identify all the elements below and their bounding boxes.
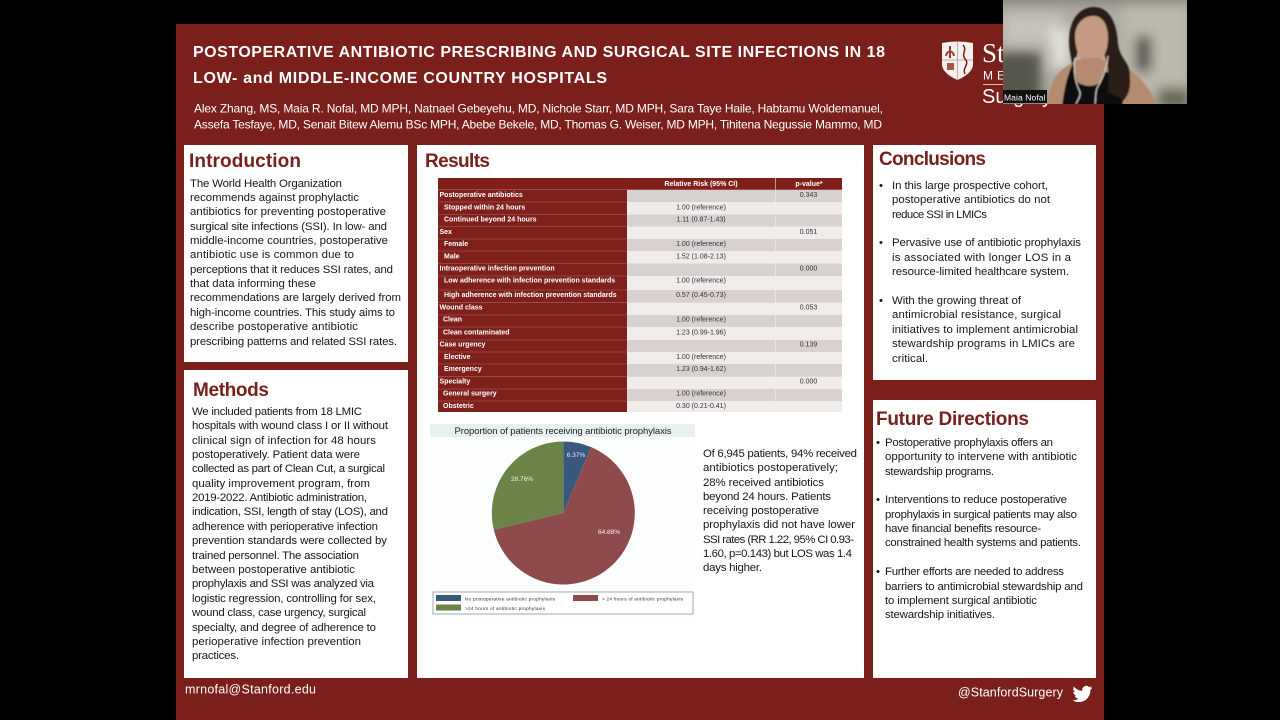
text block: methods: indication, SSI, length of stay (LOS), and (192, 506, 388, 518)
pie slice: none (563, 442, 591, 513)
results table: General surgery (443, 390, 497, 398)
text block: methods: logistic regression, controlling for sex, (192, 593, 376, 605)
text block: results summary: antibiotics postoperatively; (703, 462, 838, 474)
title: POSTOPERATIVE ANTIBIOTIC PRESCRIBING AND SURGICAL SITE INFECTIONS IN 18 (193, 44, 885, 61)
results table: 0.139 (800, 342, 817, 348)
heading: introduction: Introduction (189, 151, 301, 172)
icon: Stanford shield (942, 42, 973, 80)
results table: 1.00 (reference) (676, 204, 726, 212)
text block: future directions: Postoperative prophylaxis offers an (885, 437, 1053, 449)
heading: methods: Methods (193, 380, 269, 401)
pie chart: proportion of patients receiving antibiotic prophylaxis (430, 424, 695, 618)
text block: introduction: high-income countries. This study aims to (190, 307, 395, 319)
pie chart: proportion of patients receiving antibiotic prophylaxis: 6.37% (567, 452, 585, 459)
results table: Emergency (444, 366, 482, 373)
poster background (176, 24, 1104, 720)
text block: introduction: surgical site infections (SSI). In low- and (190, 221, 387, 233)
results table: Obstetric (443, 403, 474, 410)
results table: 0.000 (800, 266, 817, 272)
text block: conclusions: resource-limited healthcare system. (892, 266, 1069, 278)
pie chart: proportion of patients receiving antibiotic prophylaxis: Proportion of patients receiving antibiotic prophylaxis (454, 426, 672, 437)
text block: results summary: 1.60, p=0.143) but LOS was 1.4 (703, 548, 852, 560)
results table: Postoperative antibiotics (440, 192, 523, 199)
results table: 1.00 (reference) (676, 278, 726, 284)
text block: methods: hospitals with wound class I or II without (192, 420, 389, 432)
results table: 1.11 (0.87-1.43) (676, 216, 726, 224)
text block: future directions: • (876, 437, 880, 449)
text block: introduction: describe postoperative antibiotic (190, 321, 358, 333)
results table: Low adherence with infection prevention standards (444, 278, 615, 284)
text block: future directions: • (876, 494, 880, 506)
footer email: mrnofal@Stanford.edu (185, 682, 316, 696)
text block: introduction: recommendations are largely derived from (190, 292, 401, 304)
text block: conclusions: Pervasive use of antibiotic prophylaxis (892, 237, 1081, 249)
results table: Elective (444, 354, 471, 361)
text block: conclusions: critical. (892, 353, 928, 365)
text block: future directions: constrained health systems and patients. (885, 537, 1081, 549)
results table: Specialty (440, 378, 470, 386)
text block: introduction: The World Health Organization (190, 178, 342, 190)
results table: 1.23 (0.94-1.62) (676, 366, 726, 373)
results table: 1.00 (reference) (676, 241, 726, 248)
text block: introduction: middle-income countries, postoperative (190, 235, 388, 247)
authors: Alex Zhang, MS, Maia R. Nofal, MD MPH, Natnael Gebeyehu, MD, Nichole Starr, MD MPH, Sara Taye Haile, Habtamu Woldemanuel, (194, 102, 883, 116)
text block: methods: collected as part of Clean Cut, a surgical (192, 463, 385, 475)
text block: methods: prevention standards were collected by (192, 535, 387, 547)
results table: Intraoperative infection prevention (440, 266, 555, 272)
text block: future directions: • (876, 566, 880, 578)
text block: conclusions: • (879, 180, 883, 192)
text block: future directions: opportunity to intervene with antibiotic (885, 451, 1077, 463)
text block: introduction: recommends against prophylactic (190, 192, 359, 204)
panel: results (417, 145, 864, 678)
text block: conclusions: stewardship programs in LMICs are (892, 338, 1075, 350)
results table: Female (444, 241, 468, 248)
results table: 0.343 (800, 192, 817, 199)
icon: twitter bird (1072, 686, 1092, 702)
text block: conclusions: • (879, 295, 883, 307)
pie slice: over 24 hours (492, 442, 563, 530)
text block: methods: between postoperative antibiotic (192, 564, 355, 576)
panel: conclusions (873, 145, 1096, 380)
title: LOW- and MIDDLE-INCOME COUNTRY HOSPITALS (193, 70, 607, 87)
results table: p-value* (795, 181, 823, 188)
text block: methods (191, 406, 389, 662)
text block: results summary: beyond 24 hours. Patients (703, 491, 831, 503)
text block: future directions: stewardship programs. (885, 466, 994, 478)
text block: introduction (190, 178, 401, 348)
text block: conclusions: postoperative antibiotics do not (892, 194, 1051, 206)
text block: conclusions: In this large prospective cohort, (892, 180, 1048, 192)
results table: 0.051 (800, 229, 817, 236)
text block: methods: postoperatively. Patient data were (192, 449, 360, 461)
results table: Sex (440, 229, 452, 236)
heading: results: Results (425, 151, 490, 172)
results table: Stopped within 24 hours (444, 204, 525, 212)
text block: methods: perioperative infection prevention (192, 636, 361, 648)
text block: future directions: Interventions to reduce postoperative (885, 494, 1067, 506)
panel: introduction (184, 145, 408, 362)
text block: introduction: antibiotic use is common due to (190, 249, 354, 261)
text block: future directions: prophylaxis in surgical patients may also (885, 509, 1077, 521)
text block: methods: We included patients from 18 LMIC (192, 406, 362, 418)
results table (438, 178, 842, 412)
chart legend: < 24 hours of antibiotic prophylaxis (602, 596, 684, 602)
text block: methods: quality improvement program, from (192, 478, 370, 490)
webcam name tag: Maia Nofal (1004, 92, 1046, 102)
text block: results summary: 28% received antibiotics (703, 477, 824, 489)
results table: Male (444, 254, 460, 260)
results table: Clean (443, 316, 462, 324)
text block: results summary: SSI rates (RR 1.22, 95% CI 0.93- (703, 534, 854, 546)
text block: methods: prophylaxis and SSI was analyzed via (192, 578, 375, 590)
text block: results summary: days higher. (703, 562, 762, 574)
heading: conclusions: Conclusions (879, 149, 986, 170)
results table: 1.23 (0.99-1.96) (676, 330, 726, 336)
text block: conclusions: reduce SSI in LMICs (892, 209, 987, 221)
text block: introduction: that data informing these (190, 278, 316, 290)
text block: methods: specialty, and degree of adherence to (192, 622, 376, 634)
pie chart: proportion of patients receiving antibiotic prophylaxis: 64.88% (598, 529, 620, 536)
text block: conclusions: initiatives to implement antimicrobial (892, 324, 1078, 336)
results table: Relative Risk (95% CI) (664, 181, 738, 188)
results table: 1.00 (reference) (676, 316, 726, 324)
text block: results summary: prophylaxis did not have lower (703, 519, 855, 531)
text block: results summary: Of 6,945 patients, 94% received (703, 448, 857, 460)
text block: methods: practices. (192, 650, 239, 662)
text block: introduction: antibiotics for preventing postoperative (190, 206, 386, 218)
Stanford logo: MEDICINE (983, 68, 1074, 82)
text block: methods: trained personnel. The association (192, 550, 359, 562)
panel: methods (184, 370, 408, 678)
webcam video of presenter (1003, 0, 1187, 104)
text block: future directions: Further efforts are needed to address (885, 566, 1064, 578)
results table: 0.053 (800, 304, 817, 312)
pie chart: proportion of patients receiving antibiotic prophylaxis: 28.76% (511, 476, 533, 483)
heading: future directions: Future Directions (876, 409, 1029, 430)
results table: 0.57 (0.45-0.73) (676, 292, 726, 299)
text block: conclusions: • (879, 237, 883, 249)
text block: methods: clinical sign of infection for 48 hours (192, 435, 376, 447)
text block: future directions (876, 437, 1083, 621)
panel: future directions (873, 400, 1096, 678)
text block: methods: adherence with perioperative infection (192, 521, 378, 533)
results table: 1.52 (1.08-2.13) (676, 254, 726, 260)
results table: 0.000 (800, 378, 817, 386)
results table: Case urgency (440, 342, 486, 348)
chart legend: >24 hours of antibiotic prophylaxis (465, 606, 546, 612)
results table: 1.00 (reference) (676, 390, 726, 398)
results table: Continued beyond 24 hours (444, 216, 537, 224)
pie slice: under 24 hours (494, 447, 635, 584)
text block: conclusions: is associated with longer LOS in a (892, 252, 1072, 264)
text block: results summary (703, 448, 857, 574)
text block: conclusions: With the growing threat of (892, 295, 1022, 307)
results table: Clean contaminated (443, 330, 510, 336)
authors (194, 102, 883, 132)
text block: conclusions: antimicrobial resistance, surgical (892, 309, 1061, 321)
text block: future directions: barriers to antimicrobial stewardship and (885, 581, 1083, 593)
footer handle: @StanfordSurgery (958, 686, 1064, 700)
text block: results summary: receiving postoperative (703, 505, 819, 517)
chart legend: No postoperative antibiotic prophylaxis (465, 596, 556, 602)
results table: High adherence with infection prevention standards (444, 292, 617, 299)
text block: future directions: have financial benefits resource- (885, 523, 1041, 535)
Stanford logo: Surgery (982, 86, 1052, 108)
chart legend (433, 592, 693, 614)
text block: methods: 2019-2022. Antibiotic administration, (192, 492, 367, 504)
text block: introduction: perceptions that it reduces SSI rates, and (190, 264, 393, 276)
text block: conclusions (879, 180, 1081, 365)
results table: 0.30 (0.21-0.41) (676, 403, 726, 410)
text block: future directions: stewardship initiatives. (885, 609, 995, 621)
Stanford logo: Stanford (982, 38, 1075, 68)
text block: future directions: to implement surgical antibiotic (885, 595, 1037, 607)
Stanford logo (942, 38, 1075, 108)
results table: Wound class (440, 304, 483, 312)
text block: introduction: prescribing patterns and related SSI rates. (190, 336, 397, 348)
text block: methods: wound class, case urgency, surgical (191, 607, 366, 619)
results table: 1.00 (reference) (676, 354, 726, 361)
title (193, 44, 885, 87)
authors: Assefa Tesfaye, MD, Senait Bitew Alemu BSc MPH, Abebe Bekele, MD, Thomas G. Weiser, MD MPH, Tihitena Negussie Mammo, MD (194, 118, 882, 132)
